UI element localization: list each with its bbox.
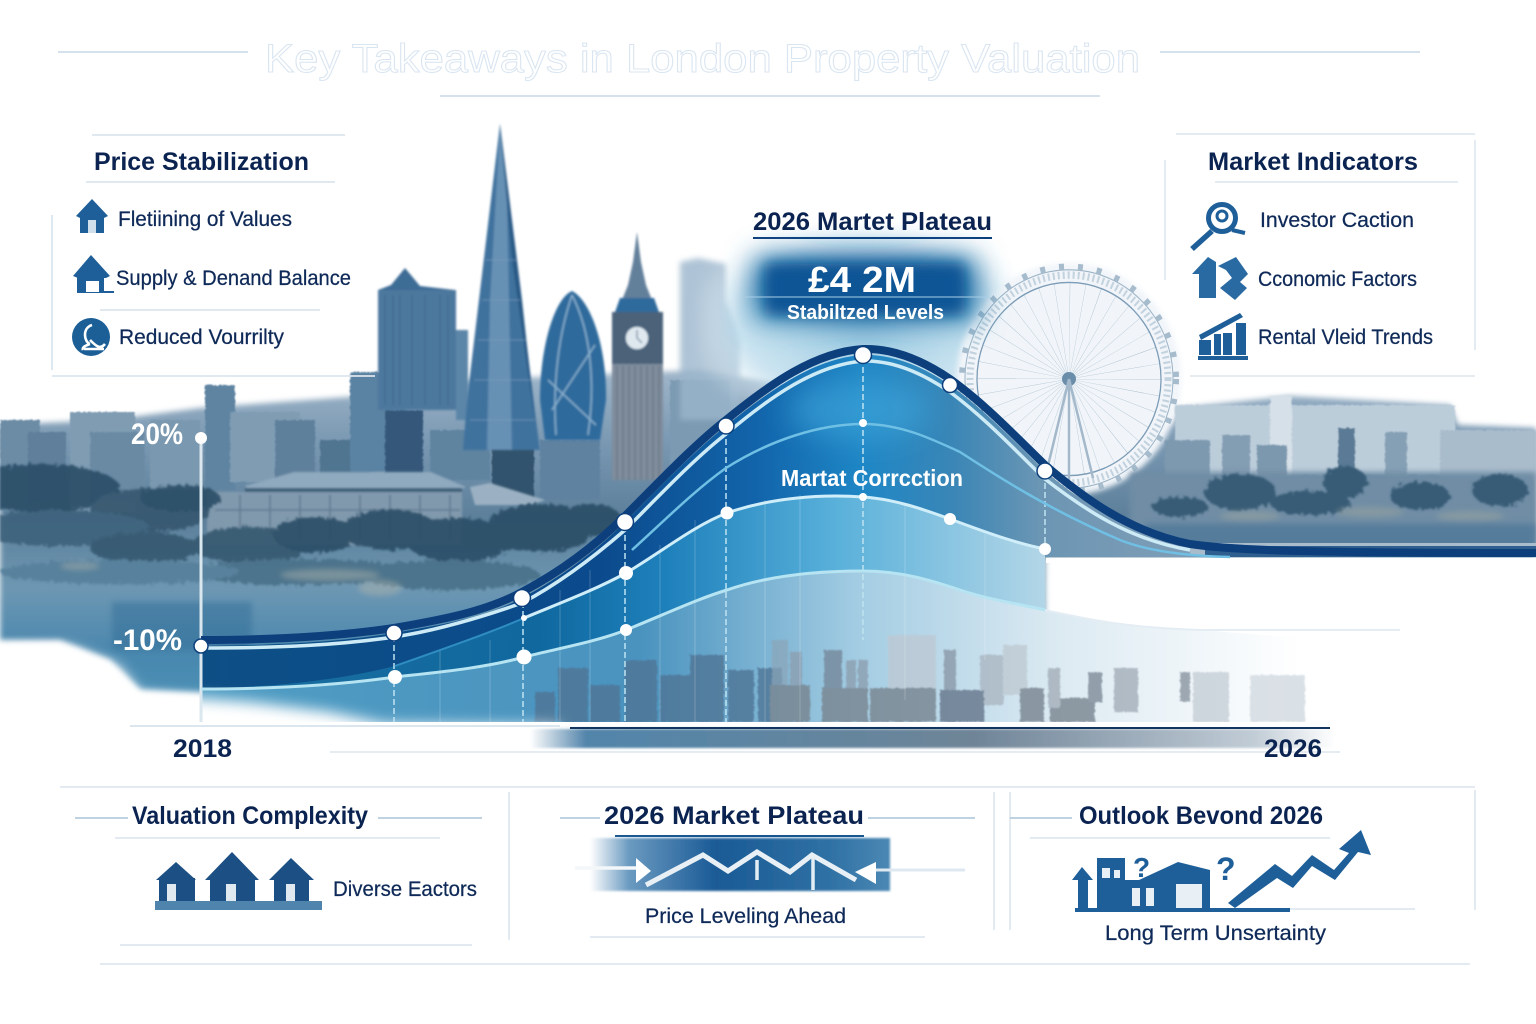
chart nodes [194,346,1053,684]
panel: market plateau [560,792,994,937]
x-axis baseline and reflection [130,724,1340,752]
panel: valuation complexity [60,787,1475,964]
dark band right of curve [1046,543,1536,563]
chart: bottom light area [201,571,1330,722]
y-axis label -10%: -10% [113,624,182,657]
y-axis label 20%: 20% [131,418,183,451]
callout: market plateau: 2026 Martet Plateau [753,208,992,236]
icon: three houses [155,852,322,910]
item text: Cconomic Factors [1258,267,1417,291]
landmark: Big Ben [612,232,663,480]
label: Long Term Unsertainty [1105,921,1326,945]
landmark: London Eye [957,263,1181,495]
landmark: glow around callout [700,225,1030,425]
chart: peak highlight [790,380,930,440]
chart lines [201,349,1536,722]
heading: 2026 Market Plateau [604,802,864,830]
icon: house with door [73,255,114,293]
heading: Outlook Bevond 2026 [1079,802,1323,830]
pale tower behind Big Ben [680,258,740,420]
chart vertical streaks [440,495,985,722]
chart label: market correction: Martat Corrcction [781,465,963,491]
middle curve [524,496,1045,618]
icon: buildings and rising arrow [1072,830,1371,912]
heading: Market Indicators [1208,148,1418,176]
item text: Supply & Denand Balance [116,266,351,290]
icon: question marks [1133,851,1236,887]
faint lower tail [1045,610,1400,630]
fog over lower left [0,648,560,790]
icon: question marks: ? [1133,852,1150,883]
left city: parliament building and trees [0,464,622,650]
label: Price Leveling Ahead [645,904,846,928]
heading: Price Stabilization [94,148,309,176]
icon: arrows puzzle [1192,257,1248,300]
item text: Investor Caction [1260,208,1414,232]
icon: house [76,199,108,233]
panel: market indicators [1165,134,1475,376]
chart: middle blue area [201,496,1045,688]
icon: circular volatility badge [72,318,110,356]
drop lines [394,358,1045,722]
item text: Fletiining of Values [118,207,292,231]
lower skyline under chart [535,635,1305,722]
landmark: city tower [378,268,468,420]
item text: Reduced Vourrilty [119,325,284,349]
secondary light curve [201,361,1190,648]
label: Diverse Eactors [333,877,477,901]
inner curve [632,424,1230,557]
faint start of middle curve [395,618,524,666]
panel: outlook beyond 2026 [1010,790,1475,945]
icon: question marks: ? [1216,851,1236,887]
right side city and trees [1130,396,1536,548]
icon: magnifier [1192,204,1245,249]
item text: Rental Vleid Trends [1258,325,1433,349]
callout: market plateau [745,208,992,324]
x-axis label 2026: 2026 [1264,735,1322,763]
skyline background band [0,370,1536,722]
chart: upper dark area [201,355,1240,688]
callout: market plateau: £4 2M [808,259,916,300]
heading: Valuation Complexity [132,802,368,830]
icon: bar chart with arrow [1198,313,1248,360]
landmark: the Shard [463,124,540,450]
lower curve [201,571,1045,689]
axis line [200,438,202,722]
top dark curve [201,349,1536,640]
icon: plateau banner [575,838,965,891]
landmark: the Gherkin [540,291,606,440]
x-axis label 2018: 2018 [173,735,232,763]
panel: price stabilization [52,135,375,376]
callout: market plateau: Stabiltzed Levels [787,302,944,324]
title: Key Takeaways in London Property Valuation [265,37,1140,81]
